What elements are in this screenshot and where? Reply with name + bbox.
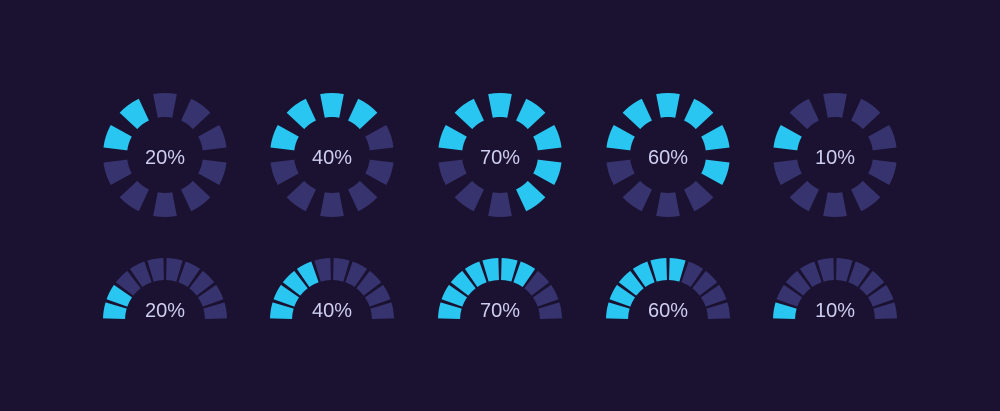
- ring 20%: 20%: [145, 147, 185, 169]
- semicircle 10%: 10%: [815, 300, 855, 322]
- semicircle 40%: [269, 257, 395, 322]
- ring 70%: 70%: [480, 147, 520, 169]
- semicircle 60%: [605, 257, 731, 322]
- ring 20%: [102, 93, 228, 217]
- ring 40%: 40%: [312, 147, 352, 169]
- semicircle 70%: 70%: [480, 300, 520, 322]
- ring 10%: 10%: [815, 147, 855, 169]
- ring 60%: [605, 93, 731, 217]
- semicircle 40%: 40%: [312, 300, 352, 322]
- semicircle 60%: 60%: [648, 300, 688, 322]
- ring 10%: [772, 93, 898, 217]
- ring 60%: 60%: [648, 147, 688, 169]
- semicircle 20%: 20%: [145, 300, 185, 322]
- ring 70%: [437, 93, 563, 217]
- semicircle 10%: [772, 257, 898, 322]
- ring 40%: [269, 93, 395, 217]
- semicircle 70%: [437, 257, 563, 322]
- semicircle 20%: [102, 257, 228, 322]
